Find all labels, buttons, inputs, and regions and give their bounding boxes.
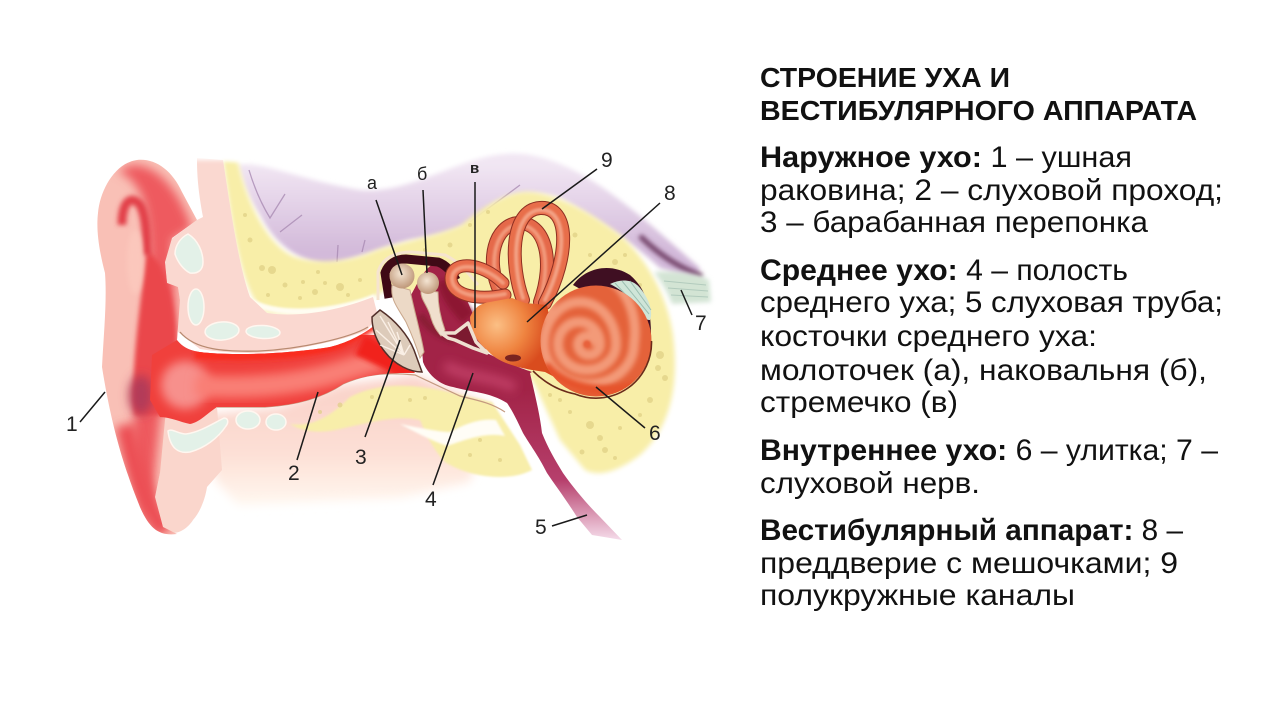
callout б: б [417,164,427,184]
incus [417,272,445,336]
top fade [190,146,250,160]
callout 3: 3 [355,446,367,469]
text block: vestibular apparatus: Вестибулярный аппарат: 8 – [760,514,1183,547]
text block: outer ear: 3 – барабанная перепонка [760,206,1148,239]
text block: middle ear: косточки среднего уха: [760,320,1097,353]
callout 4: 4 [425,488,437,511]
callout 9: 9 [601,149,613,172]
text block: vestibular apparatus [760,514,1183,612]
text block: middle ear [760,254,1223,419]
ear canal (2) [150,327,415,424]
bone speckles [243,210,668,460]
callout 8: 8 [664,182,676,205]
illustration: ear anatomy diagram [66,146,711,540]
auditory nerve (7) [573,268,711,345]
vestibule (8) [470,298,560,380]
ossicles: malleus (a), incus (б), stapes (в) [390,264,487,358]
heading: СТРОЕНИЕ УХА И [760,62,1010,93]
cartilage pieces [168,234,286,452]
callout 2 [288,392,318,485]
stapes [441,323,487,353]
text block: outer ear: раковина; 2 – слуховой проход; [760,174,1223,207]
text block: vestibular apparatus: преддверие с мешочками; 9 [760,547,1178,580]
callout б [417,164,427,273]
callout 1 [66,392,105,436]
callout 1: 1 [66,413,78,436]
icon: outer ear, auricle (1) [97,160,197,534]
callout в: в [470,160,479,177]
text block: vestibular apparatus: полукружные каналы [760,579,1075,612]
callout 9 [542,149,613,209]
callout 5: 5 [535,516,547,539]
brain membrane [238,154,702,280]
canal: posterior [493,223,547,302]
canal: anterior [515,208,563,303]
semicircular canals (9) [451,208,563,303]
attic of the tympanic cavity [378,252,478,300]
heading: ВЕСТИБУЛЯРНОГО АППАРАТА [760,95,1197,126]
text block: middle ear: Среднее ухо: 4 – полость [760,254,1128,287]
lower bone [217,374,532,477]
callout а: а [367,173,378,193]
text block: outer ear [760,141,1223,239]
heading [760,62,1197,126]
canal: lateral [451,266,505,297]
text block: inner ear: слуховой нерв. [760,467,980,500]
eardrum (3) [372,310,422,372]
callout 7: 7 [695,312,707,335]
callout 6 [596,387,661,445]
callout 2: 2 [288,462,300,485]
front tissue above canal [165,158,378,353]
callout а [367,173,402,275]
cochlea (6) [533,273,652,398]
callout 6: 6 [649,422,661,445]
lower tissue wash [205,375,490,505]
callout 3 [355,340,400,469]
text block: outer ear: Наружное ухо: 1 – ушная [760,141,1132,174]
callout 5 [535,515,587,539]
malleus [390,264,424,358]
text block: middle ear: стремечко (в) [760,386,958,419]
middle ear cavity and auditory tube (4, 5) [408,262,622,540]
text block: middle ear: молоточек (а), наковальня (б), [760,354,1207,387]
text block: inner ear: Внутреннее ухо: 6 – улитка; 7 – [760,434,1218,467]
temporal bone [223,160,675,473]
callout 8 [527,182,676,322]
text block: inner ear [760,434,1218,500]
ear lobe [155,407,222,533]
callout 4 [425,373,473,511]
callout 7 [681,290,707,335]
text block: middle ear: среднего уха; 5 слуховая труба; [760,286,1223,319]
